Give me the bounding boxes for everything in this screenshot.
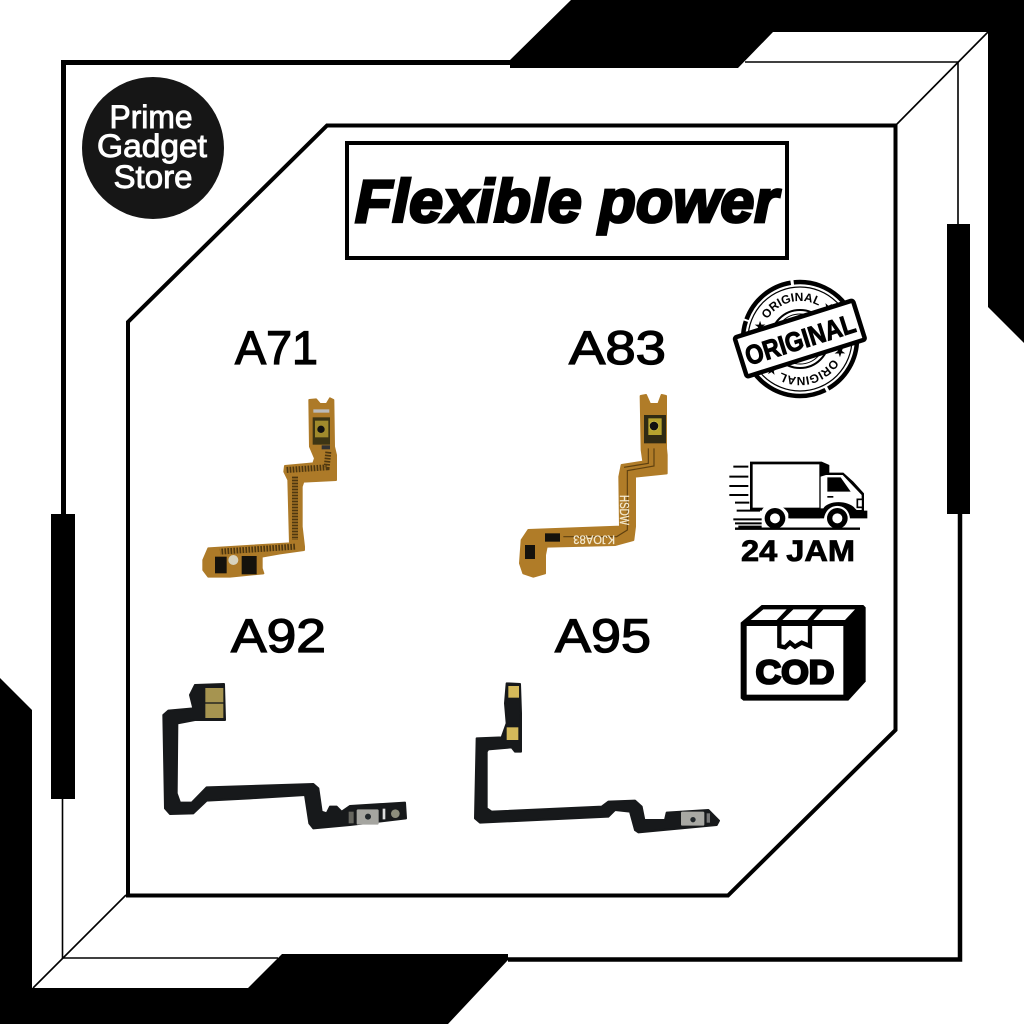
icon: COD box: [741, 605, 866, 701]
logo: Prime Gadget Store: Store: [114, 159, 192, 195]
logo: Prime Gadget Store: Gadget: [97, 128, 207, 164]
label: A92: A92: [231, 609, 326, 662]
label: A95: A95: [555, 609, 651, 662]
bar: left vertical: [51, 514, 75, 799]
icon: original stamp: ★ ORIGINAL ★: [768, 348, 846, 386]
label: A71: A71: [235, 321, 318, 374]
truck body: [750, 462, 867, 518]
shape: bottom left black corner: [0, 678, 508, 1024]
icon: delivery truck 24 JAM: [729, 462, 867, 568]
inner frame: [128, 126, 896, 896]
caption: 24 JAM: 24 JAM: [741, 535, 855, 568]
part: A71 flex cable: [203, 398, 336, 577]
logo: Prime Gadget Store: Prime: [110, 99, 192, 135]
icon: original stamp: [732, 280, 867, 398]
title box: Flexible power: [347, 143, 787, 258]
part: A83 flex cable: [520, 395, 667, 577]
printed text: HSDW: HSDW: [617, 495, 631, 525]
title box: Flexible power: Flexible power: [355, 168, 782, 235]
icon: original stamp: ★ ORIGINAL ★: [754, 292, 832, 328]
part: A92 flex cable: [163, 684, 406, 828]
bar: right vertical: [947, 224, 970, 514]
shape: top right black corner: [510, 0, 1024, 343]
icon: COD box: COD: [756, 654, 834, 691]
stamp banner: ORIGINAL: [741, 309, 859, 371]
part: A95 flex cable: [475, 683, 719, 832]
logo: Prime Gadget Store: [82, 77, 224, 219]
label: A83: A83: [569, 321, 666, 374]
printed text: KJOA83: KJOA83: [573, 533, 615, 547]
